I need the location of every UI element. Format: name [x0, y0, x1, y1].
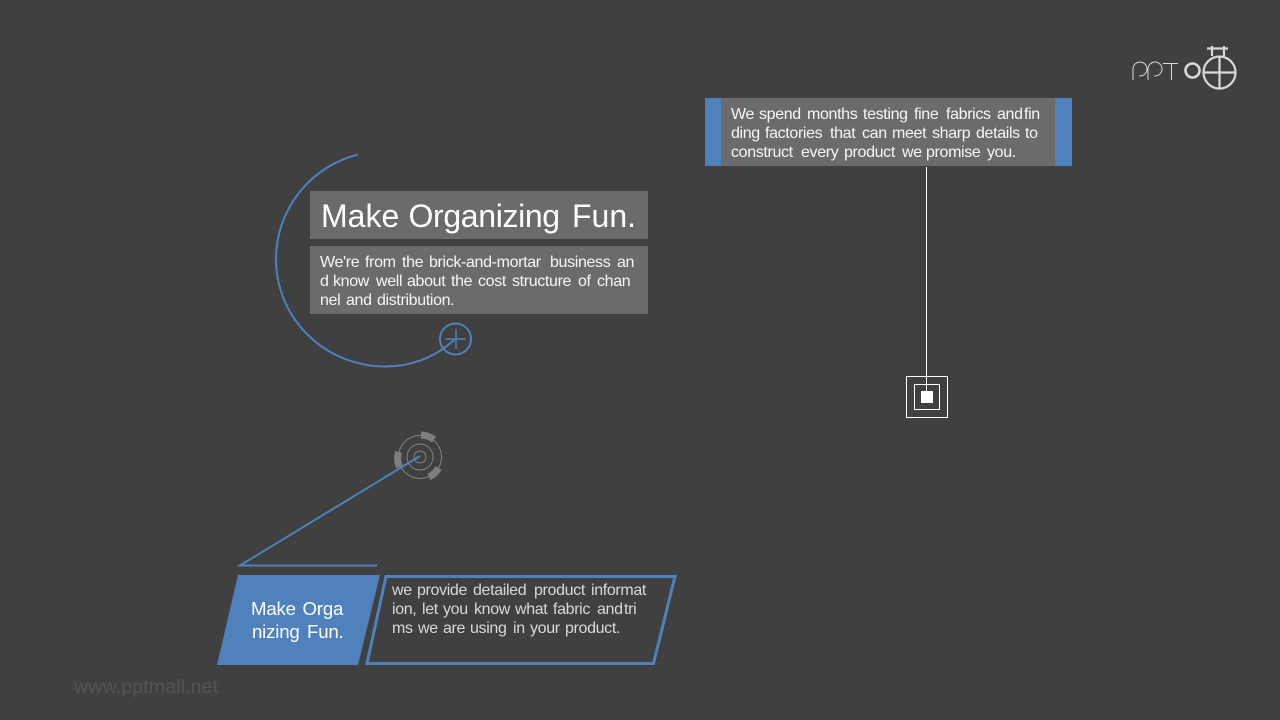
- outlined panel text: product.: [565, 620, 620, 637]
- logo crossed circle: [1204, 46, 1236, 88]
- watermark: www.pptmall.net: [73, 676, 219, 698]
- panel: heading description: [310, 246, 648, 314]
- description text: distribution.: [377, 292, 454, 309]
- top right body text: product: [844, 144, 896, 161]
- top right body text: construct: [731, 144, 794, 161]
- label text: Make: [251, 598, 296, 619]
- icon: ppt logo: [1133, 46, 1236, 88]
- top right body text: and: [997, 106, 1023, 123]
- top right body text: factories: [765, 125, 823, 142]
- description text: nel: [320, 292, 340, 309]
- top right body text: every: [801, 144, 839, 161]
- description text: the: [402, 254, 424, 271]
- description text: d: [320, 273, 329, 290]
- connector line to square marker: [926, 167, 928, 391]
- outlined panel text: you: [443, 601, 468, 618]
- top right body text: We: [731, 106, 754, 123]
- description text: from: [365, 254, 396, 271]
- top right body text: [731, 106, 1040, 161]
- outlined panel text: are: [443, 620, 466, 637]
- description text: [320, 254, 634, 309]
- right accent bar: [1055, 98, 1072, 166]
- outlined panel text: provide: [417, 582, 467, 599]
- description text: chan: [597, 273, 630, 290]
- description text: about: [407, 273, 446, 290]
- leader line from target to label: [240, 456, 420, 566]
- label text: nizing: [252, 621, 300, 642]
- top right body text: fabrics: [946, 106, 991, 123]
- outlined panel text: ms: [392, 620, 413, 637]
- description text: an: [617, 254, 634, 271]
- description text: know: [333, 273, 370, 290]
- description text: business: [550, 254, 611, 271]
- description text: and: [346, 292, 372, 309]
- outlined panel text: fabric: [553, 601, 590, 618]
- logo ring: [1186, 64, 1200, 78]
- logo wordmark: [1133, 62, 1178, 80]
- heading text: Organizing: [408, 198, 560, 234]
- description text: We're: [320, 254, 360, 271]
- outlined panel text: we: [391, 582, 412, 599]
- top right body text: spend: [759, 106, 801, 123]
- icon: concentric square marker: [906, 376, 948, 418]
- top right body text: can: [862, 125, 887, 142]
- top right body text: sharp: [932, 125, 971, 142]
- panel: outlined parallelogram text: [367, 576, 675, 664]
- outlined panel text: in: [513, 620, 525, 637]
- outlined panel text: know: [474, 601, 511, 618]
- box background: [705, 98, 1072, 166]
- outlined panel text: your: [530, 620, 561, 637]
- top right body text: we: [901, 144, 922, 161]
- top right body text: testing: [863, 106, 908, 123]
- label text: Orga: [302, 598, 344, 619]
- top right body text: meet: [892, 125, 927, 142]
- top right body text: fine: [914, 106, 939, 123]
- panel: top right text box: [705, 98, 1072, 166]
- description text: brick-and-mortar: [429, 254, 542, 271]
- top right body text: promise: [926, 144, 981, 161]
- outlined panel text: we: [417, 620, 438, 637]
- description text: well: [375, 273, 402, 290]
- description text: structure: [512, 273, 572, 290]
- outlined panel text: and: [597, 601, 623, 618]
- top right body text: you.: [987, 144, 1016, 161]
- icon: circled plus: [440, 324, 471, 354]
- icon: concentric target: [398, 435, 442, 478]
- arc with arrow around heading: [276, 154, 455, 367]
- description text: cost: [478, 273, 507, 290]
- outlined panel text: [391, 582, 647, 637]
- outlined panel text: ion,: [392, 601, 416, 618]
- top right body text: to: [1025, 125, 1038, 142]
- heading text: Make: [321, 198, 399, 234]
- outlined panel text: tri: [624, 601, 636, 618]
- left accent bar: [705, 98, 721, 166]
- top right body text: months: [807, 106, 858, 123]
- outlined panel text: what: [514, 601, 548, 618]
- label text: Fun.: [307, 621, 344, 642]
- outlined panel text: informat: [591, 582, 647, 599]
- top right body text: details: [976, 125, 1020, 142]
- outlined panel text: let: [422, 601, 439, 618]
- description text: the: [451, 273, 473, 290]
- outlined panel text: product: [534, 582, 586, 599]
- outlined panel text: detailed: [473, 582, 526, 599]
- top right body text: ding: [731, 125, 760, 142]
- target arc segments: [398, 435, 438, 477]
- description text: of: [578, 273, 592, 290]
- heading text: Fun.: [572, 198, 636, 234]
- panel: blue parallelogram label: [217, 575, 380, 665]
- panel: heading: [310, 191, 648, 239]
- label text: [251, 598, 344, 642]
- outlined panel text: using: [470, 620, 507, 637]
- top right body text: that: [830, 125, 856, 142]
- top right body text: fin: [1024, 106, 1040, 123]
